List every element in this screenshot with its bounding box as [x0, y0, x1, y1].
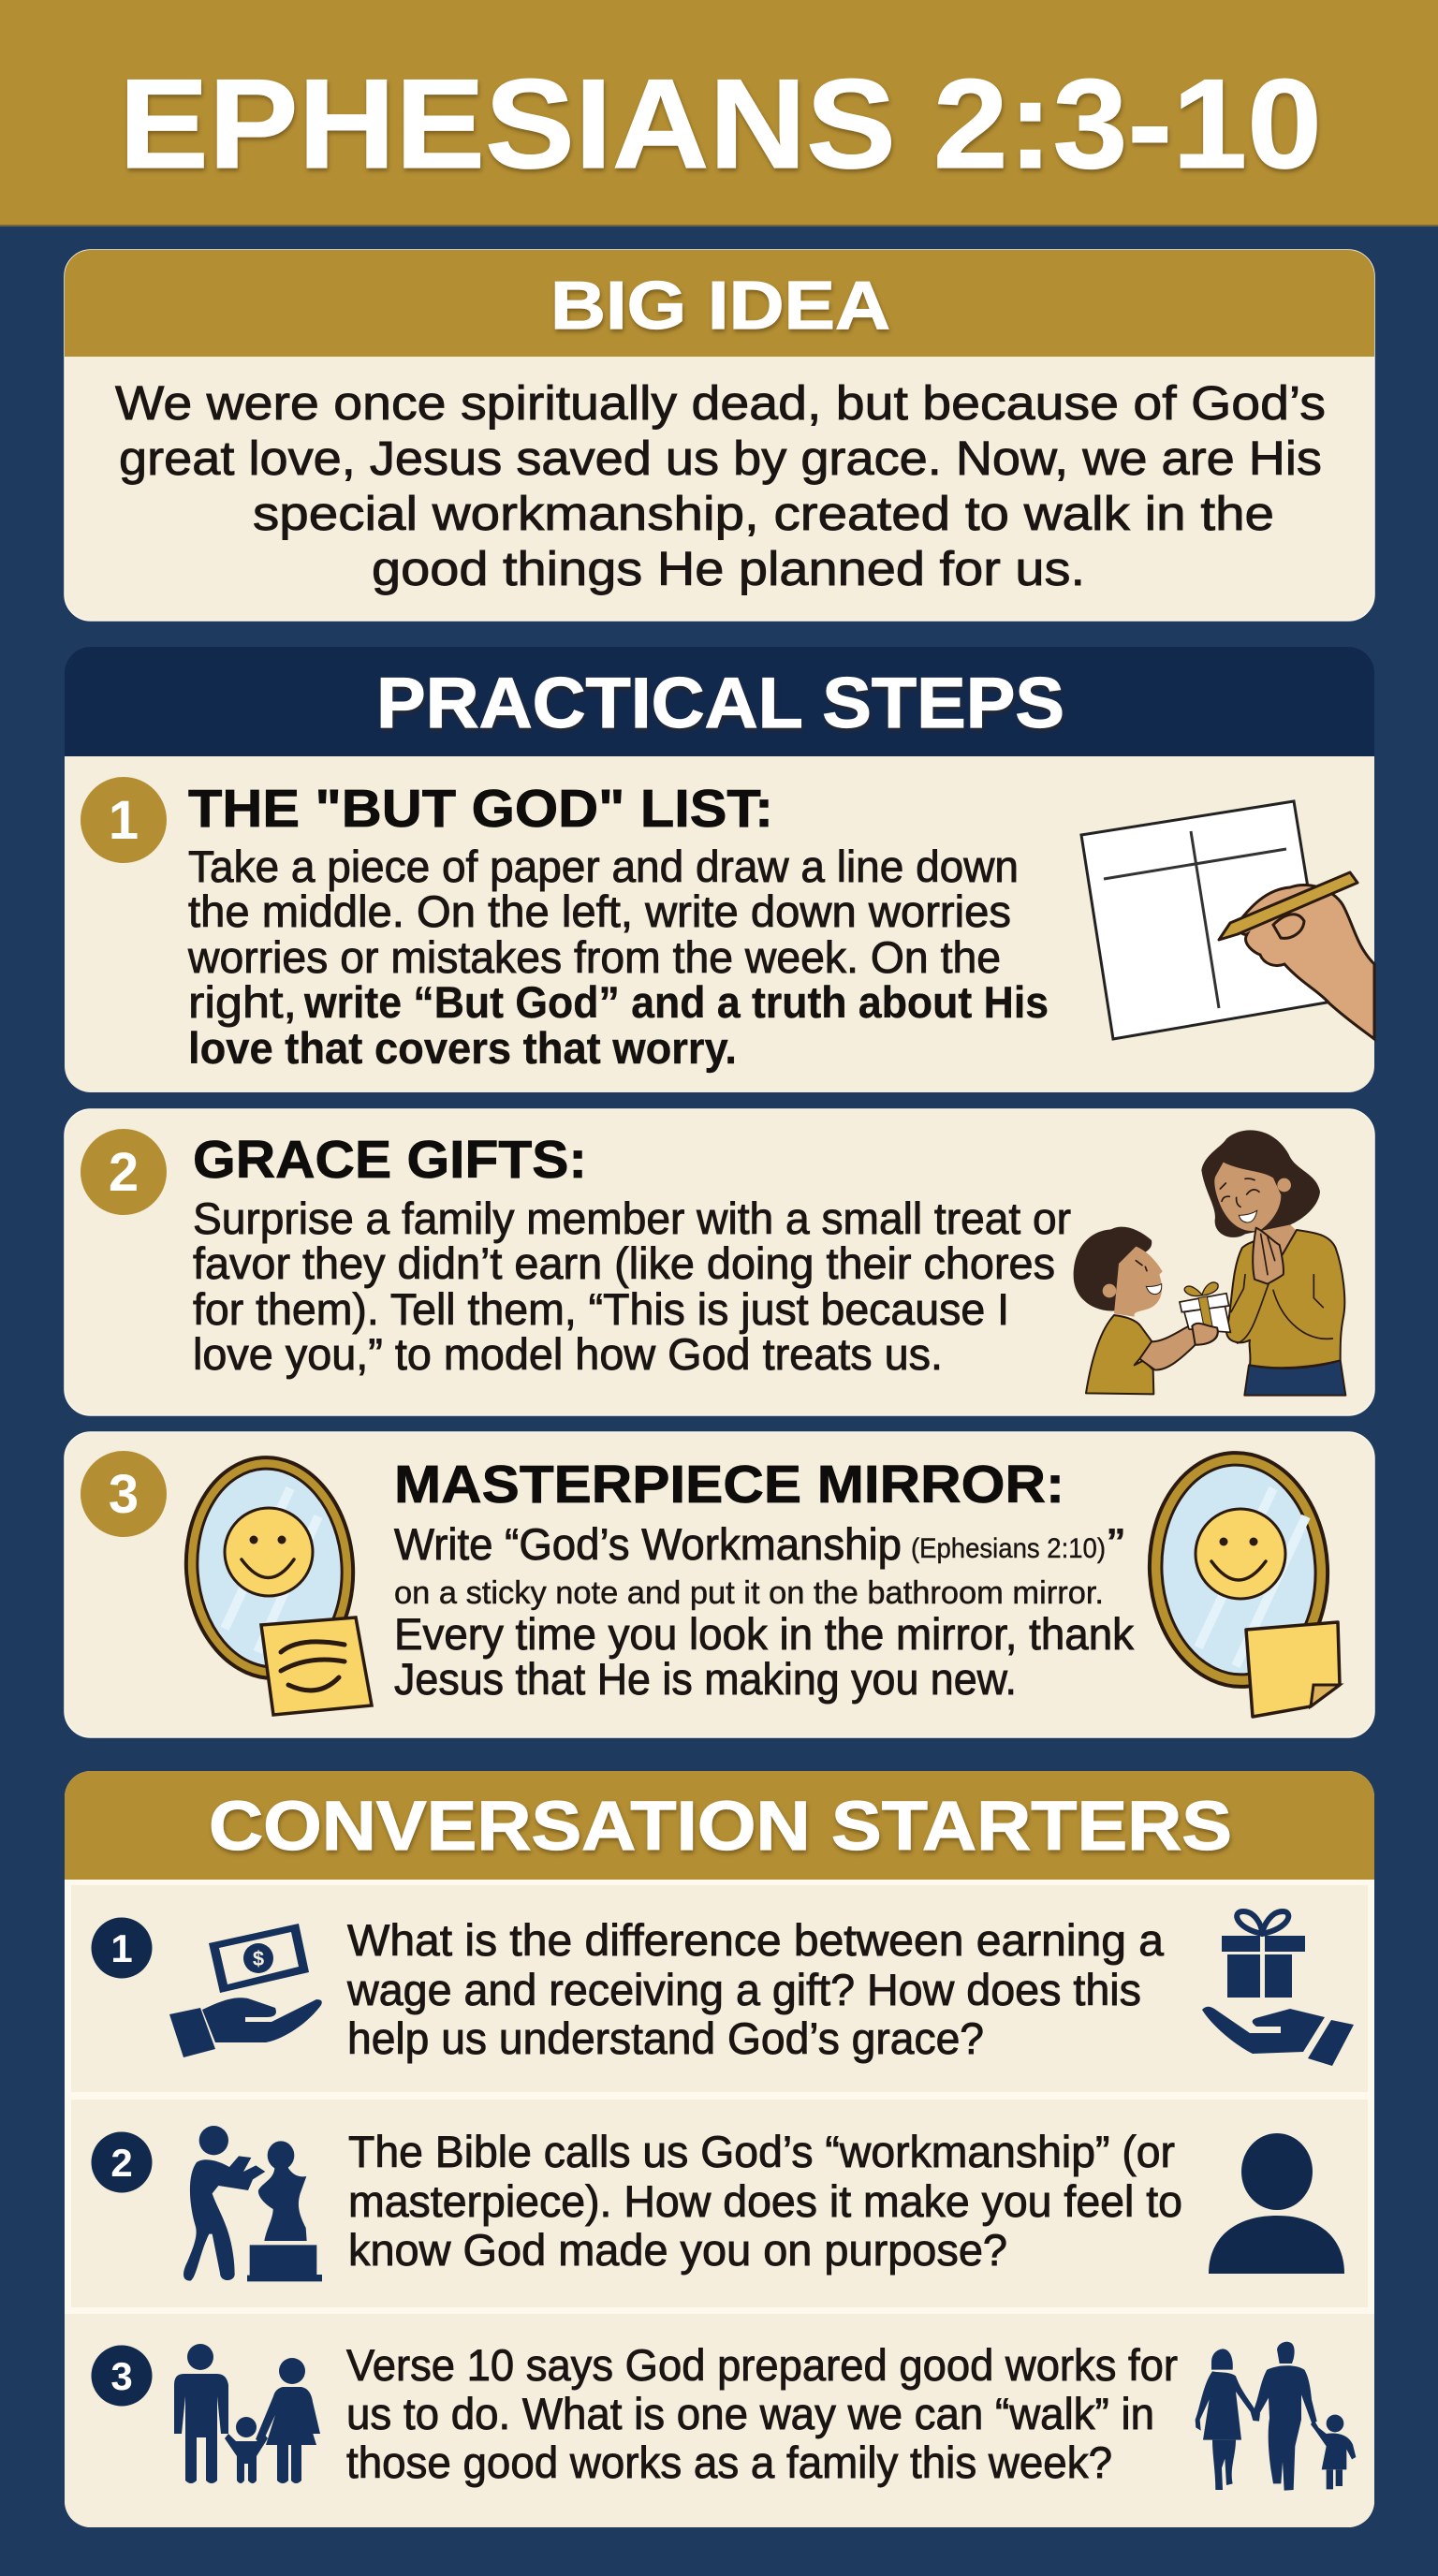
- number 1: 1: [110, 1926, 133, 1970]
- number 3: 3: [110, 2354, 133, 2398]
- number 3: [92, 2346, 152, 2406]
- conversation text 3: Verse 10 says God prepared good works for: [346, 2340, 1178, 2390]
- row 3: [65, 2314, 1374, 2527]
- panel: step 3 masterpiece mirror: [65, 1432, 1374, 1737]
- icon: money over hand: [169, 1924, 322, 2057]
- panel: step 2 grace gifts: [65, 1109, 1374, 1415]
- big idea text: [115, 376, 1326, 595]
- step 1 text: [187, 842, 1049, 1073]
- step 2 text: favor they didn’t earn (like doing their chores: [193, 1238, 1055, 1288]
- big idea text: special workmanship, created to walk in the: [253, 487, 1274, 540]
- step 1 text: the middle. On the left, write down worries: [188, 886, 1011, 936]
- conversation text 3: us to do. What is one way we can “walk” in: [346, 2389, 1154, 2438]
- conversation text 2: The Bible calls us God’s “workmanship” (or: [348, 2127, 1175, 2176]
- conversation text 1: What is the difference between earning a: [347, 1915, 1165, 1965]
- step 1 text: write “But God” and a truth about His: [303, 977, 1049, 1027]
- step 2 text: for them). Tell them, “This is just because I: [193, 1284, 1009, 1334]
- panel: big idea: [65, 250, 1374, 621]
- icon: mirror with smiley and sticky note: [1144, 1448, 1340, 1717]
- step 2 text: love you,” to model how God treats us.: [193, 1329, 943, 1379]
- heading: big idea: BIG IDEA: [550, 269, 890, 344]
- icon: sculptor carving a statue: [183, 2126, 322, 2281]
- panel: conversation starters: [65, 1771, 1374, 2527]
- heading: conversation starters: CONVERSATION STARTERS: [209, 1787, 1232, 1865]
- step 2 text: Surprise a family member with a small treat or: [193, 1193, 1071, 1243]
- conversation text 3: [346, 2340, 1178, 2487]
- number badge 2: [81, 1129, 167, 1215]
- number badge 3: 3: [109, 1464, 139, 1525]
- title: EPHESIANS 2:3-10: [119, 52, 1322, 195]
- number 2: [92, 2132, 152, 2192]
- big idea text: good things He planned for us.: [372, 542, 1085, 595]
- conversation text 2: know God made you on purpose?: [348, 2225, 1007, 2275]
- icon: mirror with smiley and note: [179, 1452, 372, 1715]
- step 3 text: Every time you look in the mirror, thank: [394, 1609, 1134, 1659]
- conversation text 3: those good works as a family this week?: [346, 2437, 1112, 2487]
- heading: masterpiece mirror: MASTERPIECE MIRROR:: [394, 1455, 1064, 1515]
- panel: step 1 but god list: [65, 756, 1374, 1092]
- icon: paper with a line and hand writing: [1081, 801, 1374, 1039]
- icon: gift over hand: [1202, 1911, 1354, 2066]
- heading: practical steps: PRACTICAL STEPS: [376, 664, 1064, 743]
- conversation text 2: masterpiece). How does it make you feel to: [348, 2176, 1182, 2226]
- step 3 text: (Ephesians 2:10): [911, 1533, 1106, 1564]
- row 2: [71, 2100, 1368, 2307]
- conversation text 1: [346, 1915, 1165, 2063]
- conversation text 1: wage and receiving a gift? How does this: [346, 1965, 1141, 2014]
- big idea text: We were once spiritually dead, but because of God’s: [115, 376, 1326, 430]
- row 1: [71, 1885, 1368, 2092]
- step 3 text: Write “God’s Workmanship: [394, 1519, 902, 1569]
- icon: family walking silhouette: [1196, 2342, 1356, 2491]
- step 1 text: Take a piece of paper and draw a line down: [188, 842, 1019, 891]
- step 1 text: right,: [188, 977, 297, 1027]
- number 1: [92, 1917, 152, 1979]
- number badge 3: [81, 1451, 167, 1537]
- step 3 text: on a sticky note and put it on the bathroom mirror.: [394, 1575, 1104, 1611]
- step 3 text: [394, 1519, 1134, 1704]
- icon: money over hand: $: [253, 1947, 264, 1970]
- title banner: [0, 0, 1438, 227]
- step 3 text: Jesus that He is making you new.: [394, 1654, 1017, 1704]
- step 1 text: love that covers that worry.: [188, 1023, 737, 1073]
- number badge 1: 1: [109, 790, 139, 851]
- icon: family pictogram: [174, 2344, 320, 2483]
- heading: the but god list: THE "BUT GOD" LIST:: [188, 779, 773, 839]
- panel: practical steps header: [65, 647, 1374, 756]
- number badge 2: 2: [109, 1142, 139, 1203]
- step 3 text: ”: [1108, 1519, 1124, 1569]
- heading: grace gifts: GRACE GIFTS:: [193, 1130, 587, 1190]
- step 2 text: [193, 1193, 1071, 1379]
- conversation text 2: [348, 2127, 1182, 2275]
- conversation text 1: help us understand God’s grace?: [347, 2013, 984, 2063]
- number 2: 2: [110, 2141, 133, 2185]
- illustration: child giving a gift to mother: [1074, 1130, 1345, 1396]
- number badge 1: [81, 777, 167, 863]
- big idea text: great love, Jesus saved us by grace. Now, we are His: [119, 432, 1322, 485]
- icon: person silhouette: [1209, 2133, 1344, 2274]
- step 1 text: worries or mistakes from the week. On the: [187, 932, 1001, 982]
